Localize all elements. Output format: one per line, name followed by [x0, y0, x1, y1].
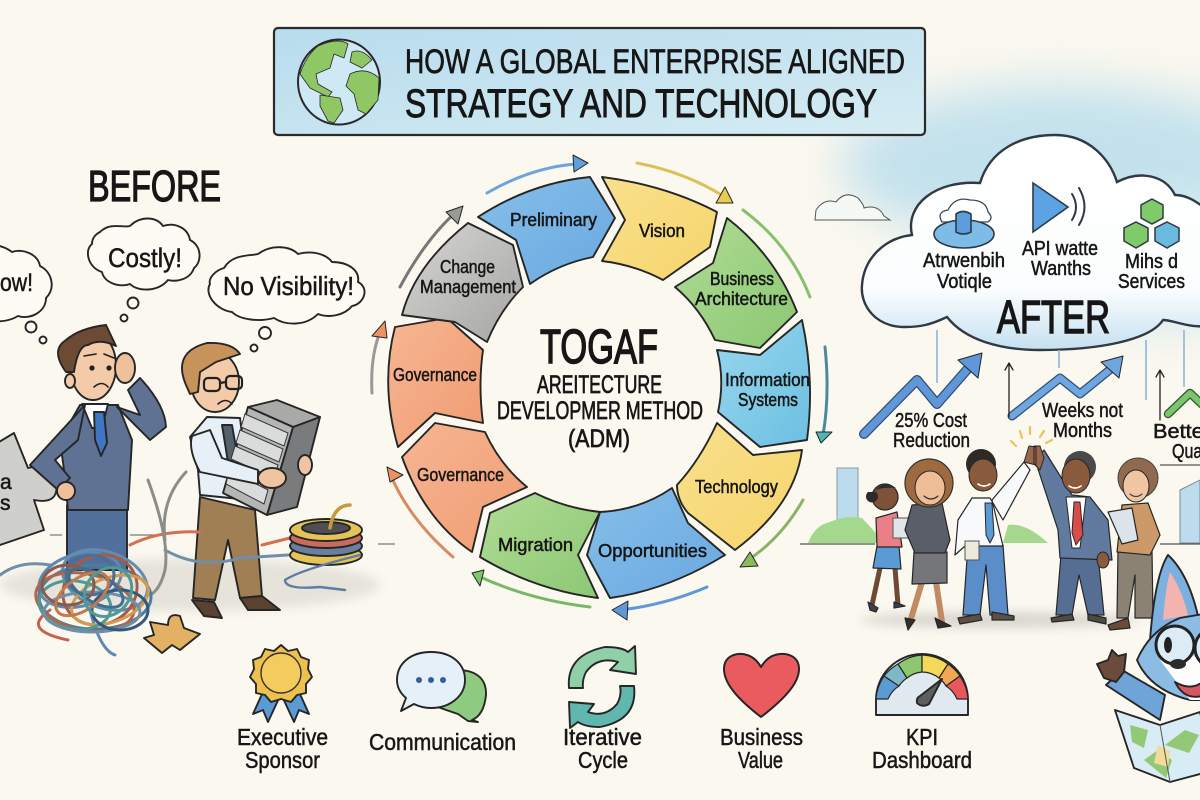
icon: API play signal	[1033, 183, 1084, 232]
left arm on hip	[30, 405, 85, 490]
value icon: heart: Business	[720, 724, 803, 750]
segment: Business Architecture: Business	[710, 269, 774, 289]
segment: Information Systems: Systems	[738, 390, 798, 410]
thought bubble: No Visibility: No Visibility!	[223, 271, 354, 301]
title text	[405, 43, 905, 126]
metric: cost reduction arrow: 25% Cost	[895, 410, 967, 432]
person: man in white shirt high-fiving	[955, 449, 1030, 624]
trousers	[193, 497, 262, 600]
center label: (ADM)	[568, 425, 630, 453]
ground shadow	[860, 612, 1140, 628]
illustration: broken puzzle piece: a	[0, 471, 12, 494]
center label: DEVELOPMER METHOD	[497, 397, 703, 425]
skyline backdrop	[800, 465, 1200, 544]
segment: Opportunities: Opportunities	[598, 541, 707, 561]
segment: Information Systems	[717, 320, 810, 447]
value icon: heart: Value	[738, 747, 783, 773]
character: engineer carrying server	[182, 343, 320, 618]
illustration: broken puzzle piece: s	[0, 492, 10, 515]
cloud service labels	[923, 238, 1185, 293]
diagram: TOGAF ADM cycle	[372, 155, 832, 620]
small cloud	[815, 195, 890, 220]
cloud service labels: Mihs d	[1125, 251, 1178, 273]
segment: Change Management: Management	[420, 277, 516, 297]
glasses and eye	[1156, 626, 1200, 668]
title banner	[274, 28, 925, 135]
mouth	[1175, 680, 1200, 697]
head	[1137, 612, 1200, 700]
person: woman with clipboard	[1108, 458, 1160, 630]
segment: Technology: Technology	[695, 477, 778, 497]
center label: TOGAF	[540, 321, 658, 374]
value icon: iterative cycle: Cycle	[578, 747, 628, 773]
metric: cost reduction arrow: Reduction	[893, 430, 970, 452]
cloud service labels: Votiqle	[937, 271, 992, 293]
title text: STRATEGY AND TECHNOLOGY	[405, 82, 877, 126]
thought bubble: Costly	[88, 218, 200, 322]
segment: Business Architecture	[675, 218, 797, 348]
heading: AFTER: AFTER	[997, 291, 1110, 343]
torso	[60, 405, 132, 510]
value icon: communication	[369, 652, 516, 755]
value icon: iterative cycle	[563, 646, 642, 773]
segment: Change Management	[402, 223, 523, 342]
cloud service labels: Wanths	[1031, 258, 1091, 280]
value icon: KPI gauge: Dashboard	[872, 747, 972, 773]
segment: Change Management: Change	[440, 257, 495, 277]
segment: Vision	[602, 177, 717, 280]
glasses	[204, 376, 242, 391]
value icon: executive sponsor: Sponsor	[245, 747, 320, 773]
floor shadow left	[0, 559, 380, 611]
arm and paw	[1106, 670, 1165, 720]
head	[70, 332, 116, 400]
thought bubble: Slow	[0, 245, 52, 344]
metric: weeks not months arrow	[1005, 356, 1123, 442]
cloud service labels: Atrwenbih	[923, 250, 1005, 272]
value icon: communication: Communication	[369, 729, 516, 755]
segment: Migration: Migration	[498, 535, 573, 555]
segment: Vision: Vision	[639, 221, 685, 241]
value icon: executive sponsor	[237, 645, 328, 773]
thought bubble: Slow: ow!	[0, 269, 33, 297]
illustration: broken puzzle piece	[0, 433, 57, 545]
arm holding server	[191, 430, 258, 484]
segment: Governance upper	[388, 318, 483, 447]
raised arm	[117, 378, 166, 440]
segment: Information Systems: Information	[725, 370, 810, 390]
segment: Migration	[480, 493, 600, 598]
metric: weeks not months arrow: Months	[1053, 420, 1112, 442]
thought bubble: Costly: Costly!	[108, 243, 182, 273]
team celebrating	[860, 427, 1160, 630]
icon: server tower	[223, 400, 320, 515]
segment: Opportunities	[587, 488, 725, 598]
sky wash behind the cloud	[840, 85, 1200, 330]
head	[191, 352, 239, 412]
icon: globe	[298, 40, 380, 124]
title text: HOW A GLOBAL ENTERPRISE ALIGNED	[405, 43, 905, 81]
metric: better quality arrow	[1153, 370, 1200, 463]
shirt and tie	[82, 404, 108, 428]
ground line left	[50, 535, 395, 544]
center label	[497, 321, 703, 453]
cable coil	[285, 505, 362, 590]
character: worried executive	[30, 325, 166, 570]
segment: Governance lower	[402, 423, 527, 552]
hands and spark	[1011, 427, 1052, 470]
person: girl with tablet	[866, 484, 908, 612]
segment: Governance upper: Governance	[393, 365, 477, 385]
heading: BEFORE: BEFORE	[88, 162, 221, 211]
shirt	[190, 417, 250, 500]
illustration: tangled cables	[0, 472, 362, 655]
mascot: blue fox with map	[1097, 555, 1200, 782]
metric: cost reduction arrow	[864, 353, 982, 452]
cloud service labels: API watte	[1022, 238, 1098, 260]
ear	[1150, 555, 1200, 640]
segment: Technology	[677, 423, 802, 550]
segment: Governance lower: Governance	[417, 465, 504, 485]
segment: Preliminary	[478, 177, 615, 284]
thought bubble: No Visibility	[208, 247, 365, 352]
value icon: KPI gauge	[872, 654, 972, 773]
gold puzzle piece	[144, 615, 200, 653]
cycle arrows	[372, 155, 832, 620]
value icon: KPI gauge: KPI	[906, 724, 938, 750]
connector lines from cloud	[937, 330, 1184, 400]
folded map	[1115, 710, 1200, 782]
cloud service labels: Services	[1118, 271, 1185, 293]
big cloud with services	[862, 135, 1200, 350]
segment: Business Architecture: Architecture	[695, 289, 788, 309]
icon: database	[934, 199, 994, 248]
value icon: heart	[720, 654, 803, 773]
value icon: iterative cycle: Iterative	[563, 724, 642, 750]
segment: Preliminary: Preliminary	[510, 210, 597, 230]
center label: AREITECTURE	[537, 371, 662, 399]
value icon: executive sponsor: Executive	[237, 724, 328, 750]
icon: microservice cubes	[1124, 199, 1179, 248]
person: man in suit high-fiving	[1035, 450, 1112, 624]
person: woman with curly hair	[905, 459, 953, 630]
legs	[67, 505, 127, 570]
metric: weeks not months arrow: Weeks not	[1042, 400, 1123, 422]
shoes	[192, 596, 280, 618]
